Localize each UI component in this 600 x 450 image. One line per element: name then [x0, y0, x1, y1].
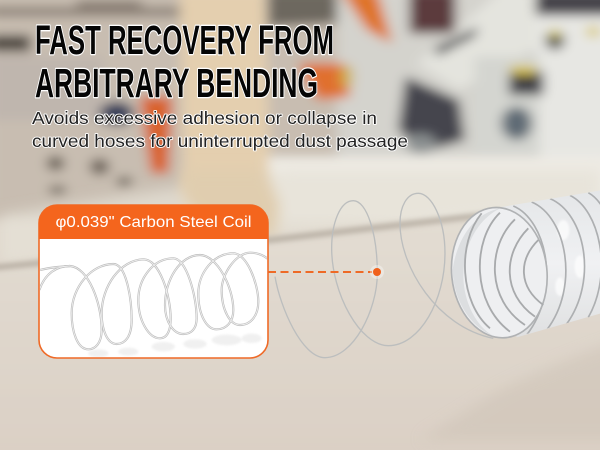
panel header — [39, 205, 268, 239]
title: ARBITRARY BENDING — [35, 60, 318, 106]
subtitle: curved hoses for uninterrupted dust passage — [32, 131, 408, 151]
title: FAST RECOVERY FROM — [35, 17, 334, 63]
subtitle: Avoids excessive adhesion or collapse in — [32, 108, 377, 128]
loose wire spiral — [275, 193, 493, 358]
subtitle — [32, 108, 408, 151]
title — [35, 17, 334, 106]
hose body — [445, 190, 600, 343]
marker dot — [370, 265, 384, 279]
dashed leader line — [268, 265, 384, 279]
callout panel: carbon steel coil — [39, 205, 268, 358]
hose mouth — [445, 203, 554, 343]
panel header: φ0.039" Carbon Steel Coil — [56, 214, 252, 231]
bent steel coil and hose — [275, 190, 600, 358]
coil close-up — [39, 253, 268, 357]
